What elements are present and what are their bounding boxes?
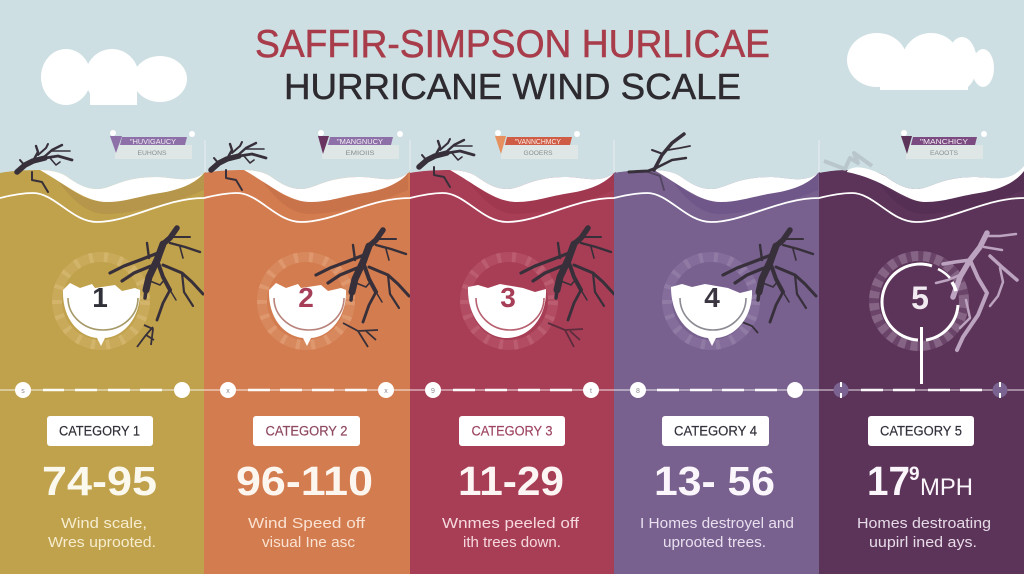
- panel 4 background: [614, 170, 820, 574]
- panel 3 big tree: [521, 228, 614, 320]
- panel 4 big tree: [723, 230, 816, 322]
- panel 5 description: Homes destroating: [857, 515, 991, 532]
- panel 1 dial face: [63, 283, 140, 346]
- panel 1 big tree: [110, 228, 203, 320]
- title line 2: HURRICANE WIND SCALE: [284, 66, 741, 107]
- title: [255, 23, 770, 107]
- title line 1: SAFFIR-SIMPSON HURLICAE: [255, 23, 770, 66]
- wind line across panels: [0, 193, 1024, 222]
- panel 2 category label: CATEGORY 2: [266, 424, 348, 438]
- panel 2 ribbon: EMIOIIS: [346, 150, 375, 157]
- panel 4 dial face: [671, 284, 752, 346]
- panel 1 dial number: 1: [92, 282, 108, 313]
- panel 1 wind speed: 74-95: [42, 458, 157, 504]
- panel 5 dial outline: [882, 264, 958, 340]
- timeline marker glyphs: x: [384, 388, 388, 395]
- panel 3 dial arc: [476, 298, 544, 330]
- panel 2 description: visual Ine asc: [262, 534, 355, 551]
- panel: category 3: [410, 130, 616, 574]
- panel 5 ribbon: [901, 130, 987, 159]
- panel 3 top tree: [419, 139, 474, 187]
- panel 5 darker wave band: [875, 171, 1024, 214]
- panel 3 background: [410, 170, 616, 574]
- panel 5 gauge needle: [920, 327, 923, 384]
- panel 5 description: [857, 515, 991, 551]
- timeline marker glyphs: x: [226, 388, 230, 395]
- panel 3 description: [442, 515, 580, 551]
- timeline marker glyphs: t: [590, 388, 592, 395]
- panel 2 dial number: 2: [298, 282, 314, 313]
- timeline markers: [15, 382, 803, 398]
- panel 2 snow wave: [244, 170, 408, 202]
- panel 3 small root: [548, 323, 583, 347]
- panel 2 background: [204, 170, 410, 574]
- timeline marker glyphs: s: [21, 388, 25, 395]
- panel 4 description: [640, 515, 794, 551]
- icon: left cloud: [41, 49, 187, 105]
- panel 5 category label: CATEGORY 5: [880, 424, 962, 438]
- panel 4 description: uprooted trees.: [663, 534, 766, 551]
- panel 5 wind speed: 17: [867, 458, 910, 504]
- panel divider ticks: [205, 140, 819, 172]
- panel 3 description: ith trees down.: [463, 534, 561, 551]
- panel 1 description: Wres uprooted.: [48, 534, 156, 551]
- panel 3 category label: [459, 416, 565, 446]
- panel 1 ribbon: [110, 130, 195, 159]
- icon: right cloud: [847, 33, 994, 90]
- panel 5 wind speed: MPH: [920, 474, 973, 501]
- panel 4 category label: CATEGORY 4: [674, 424, 757, 438]
- panel 5 snow wave: [847, 166, 1024, 202]
- timeline markers category 5: [834, 382, 1008, 398]
- panel 3 wind speed: 11-29: [458, 458, 564, 504]
- panel 3 snow wave: [450, 170, 614, 202]
- panel 2 small root: [343, 323, 378, 347]
- panel 2 ribbon: [318, 130, 403, 159]
- panel 3 dial ring: [465, 257, 553, 345]
- panel 5 ribbon: "MANCHICY: [920, 139, 968, 146]
- panel 5 wind speed: 9: [909, 464, 920, 485]
- panel 1 small root: [137, 325, 154, 347]
- panel 1 description: [48, 515, 156, 551]
- panel 1 top tree: [17, 144, 72, 192]
- panel 1 darker wave band: [56, 173, 204, 214]
- panel 2 dial arc: [274, 298, 344, 330]
- panel 4 category label: [662, 416, 769, 446]
- panel 1 ribbon: EUHONS: [138, 150, 167, 157]
- panel 3 description: Wnmes peeled off: [442, 515, 580, 532]
- panel 5 background: [819, 170, 1024, 574]
- timeline marker glyphs: 9: [431, 388, 435, 395]
- panel: category 1: [0, 130, 206, 574]
- panel 4 snow wave: [654, 170, 818, 202]
- panel 5 ghost tree: [824, 153, 872, 169]
- panel 1 dial ring: [57, 257, 145, 345]
- panel 3 dial number: 3: [500, 282, 516, 313]
- panel 3 darker wave band: [466, 173, 614, 214]
- panel 3 dial face: [468, 284, 546, 338]
- panel 2 category label: [253, 416, 360, 446]
- panel: category 4: [614, 134, 820, 574]
- panel 3 ribbon: [495, 130, 580, 159]
- panel 1 description: Wind scale,: [61, 515, 147, 532]
- panel: category 2: [204, 130, 410, 574]
- panel 4 dial number: 4: [704, 282, 720, 313]
- panel 1 ribbon: "HUVIGAUCY: [130, 139, 176, 146]
- panel 5 dial number: 5: [911, 280, 929, 316]
- panel 3 ribbon: "VANNCHMCY: [515, 139, 561, 146]
- panel 1 dial arc: [68, 298, 138, 330]
- timeline marker glyphs: [21, 388, 640, 395]
- panel 2 dial face: [269, 283, 346, 346]
- panel 2 description: [248, 515, 366, 551]
- panel 2 description: Wind Speed off: [248, 515, 366, 532]
- timeline marker glyphs: 8: [636, 388, 640, 395]
- panel 2 wind speed: 96-110: [236, 458, 373, 504]
- panel 5 wind speed: [867, 458, 973, 504]
- panel 2 big tree: [316, 230, 409, 322]
- timeline: [0, 382, 1024, 398]
- panel 4 dial ring: [667, 257, 755, 345]
- panel 1 snow wave: [40, 170, 204, 202]
- panel 1 category label: CATEGORY 1: [59, 424, 140, 438]
- panel 5 description: uupirl ined ays.: [869, 534, 977, 551]
- panel 3 ribbon: GOOERS: [524, 150, 553, 157]
- panel 5 ribbon: EAOOTS: [930, 150, 959, 157]
- panel 4 description: I Homes destroyel and: [640, 515, 794, 532]
- panel 2 darker wave band: [260, 173, 408, 214]
- panel 4 dial arc: [680, 298, 746, 330]
- timeline dashes: [43, 389, 982, 391]
- panel 4 darker wave band: [670, 173, 818, 214]
- panel 2 ribbon: "MANGNUCY: [337, 139, 383, 146]
- panel 4 small root: [742, 322, 758, 333]
- panel 1 category label: [47, 416, 153, 446]
- panel 2 dial ring: [262, 257, 350, 345]
- panel 5 dial ring: [874, 256, 964, 346]
- panel 5 lightning tree: [936, 233, 1017, 350]
- panel 3 category label: CATEGORY 3: [472, 424, 552, 438]
- panel 4 wind speed: 13- 56: [654, 458, 775, 504]
- panel 2 top tree: [211, 142, 266, 190]
- panel 4 top tree: [629, 134, 690, 190]
- panel 1 background: [0, 170, 206, 574]
- panel 5 category label: [868, 416, 974, 446]
- panel: category 5: [819, 130, 1024, 574]
